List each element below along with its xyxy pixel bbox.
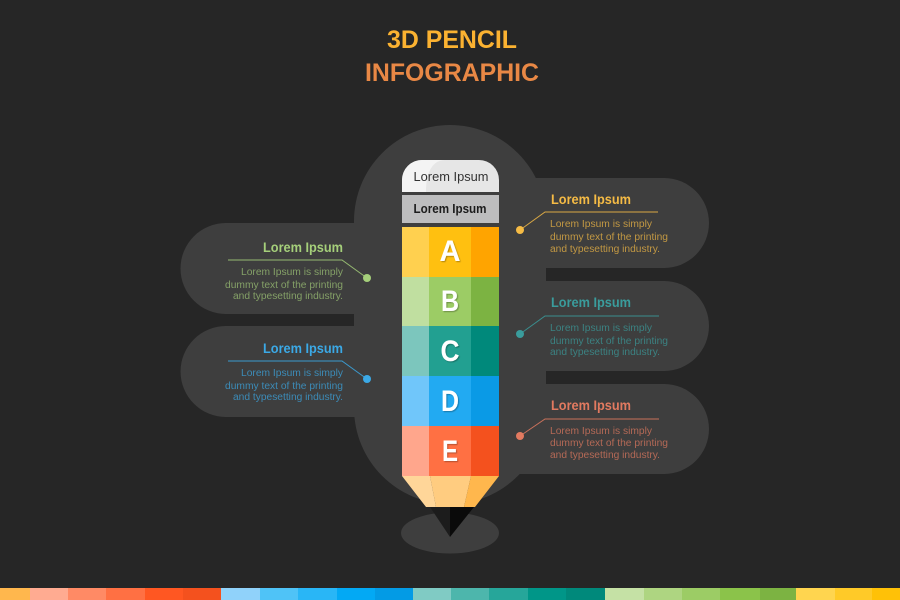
bottom colour strip [0, 588, 900, 600]
panel: right teal [510, 281, 709, 371]
callout: right red: dummy text of the printing [550, 438, 668, 449]
pencil segment D [402, 376, 499, 426]
callout: right red: and typesetting industry. [550, 450, 660, 461]
pencil wood cone [402, 476, 499, 507]
callout: right teal [516, 295, 668, 358]
callout: right red: Lorem Ipsum [551, 398, 631, 413]
pencil eraser cap: Lorem Ipsum [414, 169, 488, 184]
shadow ellipse below tip [401, 512, 499, 554]
pencil segment B: B [441, 285, 459, 318]
callout: right yellow: Lorem Ipsum is simply [550, 219, 652, 230]
callout: right teal: Lorem Ipsum is simply [550, 323, 652, 334]
callout: right yellow [516, 192, 668, 255]
panel: left green [180, 223, 380, 314]
callout: right yellow: Lorem Ipsum [551, 192, 631, 207]
pencil segment B [402, 277, 499, 326]
callout: right yellow: and typesetting industry. [550, 244, 660, 255]
callout: left green [225, 240, 371, 302]
callout: right red: Lorem Ipsum is simply [550, 426, 652, 437]
callout: left blue: Lorem Ipsum is simply [241, 368, 343, 379]
callout: left blue: dummy text of the printing [225, 381, 343, 392]
callout: left green: Lorem Ipsum [263, 240, 343, 255]
title [365, 26, 539, 87]
callout: left green: Lorem Ipsum is simply [241, 267, 343, 278]
callout: right teal: dummy text of the printing [550, 336, 668, 347]
title: 3D PENCIL [387, 26, 517, 54]
title: INFOGRAPHIC [365, 59, 539, 87]
callout: right yellow: dummy text of the printing [550, 232, 668, 243]
background panels [180, 125, 709, 554]
pencil [402, 160, 499, 537]
panel: right red [510, 384, 709, 474]
panel: right yellow [510, 178, 709, 268]
pencil segment C [402, 326, 499, 376]
panel: centre body [354, 125, 546, 504]
pencil eraser cap [402, 160, 499, 192]
pencil segment E: E [442, 435, 458, 468]
callout: left blue: Lorem Ipsum [263, 341, 343, 356]
pencil segment E [402, 426, 499, 476]
pencil segment A [402, 227, 499, 277]
callout: right teal: and typesetting industry. [550, 347, 660, 358]
panel: left blue [181, 326, 380, 417]
pencil segment A: A [440, 235, 460, 268]
pencil segment C: C [440, 335, 460, 368]
callout: left blue [225, 341, 371, 403]
callout: left blue: and typesetting industry. [233, 392, 343, 403]
callout: right teal: Lorem Ipsum [551, 295, 631, 310]
pencil ferrule [402, 195, 499, 223]
callout: right red [516, 398, 668, 461]
callout: left green: and typesetting industry. [233, 291, 343, 302]
pencil lead tip [430, 507, 474, 537]
pencil segment D: D [441, 385, 459, 418]
callout: left green: dummy text of the printing [225, 280, 343, 291]
pencil ferrule: Lorem Ipsum [414, 201, 486, 216]
